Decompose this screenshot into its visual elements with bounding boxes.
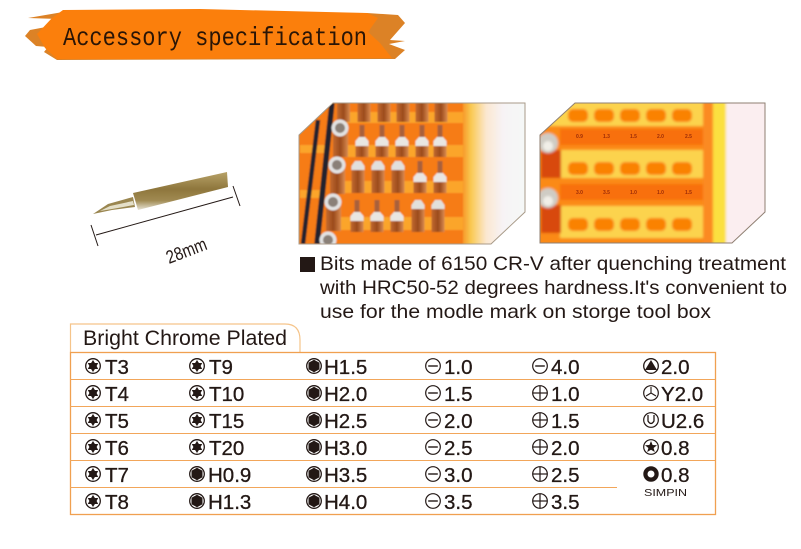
mold markings: 2.0 (657, 134, 664, 140)
paragraph line 3: use for the modle mark on storge tool box (320, 301, 711, 323)
T20 (190, 437, 244, 460)
star 0.8 (644, 437, 690, 460)
H2.0: H2.0 (324, 383, 367, 406)
column: torx T3-T8 (86, 356, 129, 514)
mold markings: 3.0 (576, 190, 583, 196)
T3 (86, 356, 129, 379)
H3.0: H3.0 (324, 437, 367, 460)
title banner (25, 9, 405, 60)
mold markings: 1.5 (630, 134, 637, 140)
star 0.8: 0.8 (661, 437, 690, 460)
phillips 1.5 (533, 410, 580, 433)
phillips 2.5: 2.5 (551, 464, 580, 487)
table frame and row lines (70, 352, 716, 514)
mold markings: 3.5 (603, 190, 610, 196)
triangle 2.0: 2.0 (661, 356, 690, 379)
dimension label: 28mm (163, 233, 210, 268)
T10 (190, 383, 244, 406)
tray ledges (300, 112, 473, 230)
right stripes (703, 100, 713, 248)
column: slotted 1.0-3.5 (426, 356, 472, 514)
slot 1.5: 1.5 (444, 383, 472, 406)
U2.6: U2.6 (661, 410, 704, 433)
mold markings: 1.0 (657, 190, 664, 196)
darker recess shading (560, 129, 703, 200)
photo frame (540, 103, 765, 243)
column: slot 4.0 and phillips (533, 356, 580, 514)
slot 3.5 (426, 491, 472, 514)
mold markings: 1.0 (630, 190, 637, 196)
sockets (538, 133, 561, 233)
slot 4.0 (533, 356, 580, 379)
title text: Accessory specification (63, 23, 367, 53)
T5 (86, 410, 129, 433)
T9: T9 (209, 356, 233, 379)
dimension line (91, 186, 240, 246)
white fade (462, 104, 524, 244)
slot 2.5: 2.5 (444, 437, 472, 460)
triangle 2.0 (644, 356, 690, 379)
mold markings: 0.9 (576, 134, 583, 140)
icon: screwdriver bit (93, 172, 228, 214)
phillips 1.0 (533, 383, 580, 406)
description text block (300, 253, 787, 323)
slot 3.5: 3.5 (444, 491, 472, 514)
phillips 3.5 (533, 491, 580, 514)
H1.3: H1.3 (208, 491, 251, 514)
simpin 0.8 (644, 464, 690, 499)
mold markings (576, 134, 692, 196)
slot 1.0: 1.0 (444, 356, 472, 379)
photo: bits in storage box (300, 104, 524, 244)
photo frame (299, 103, 525, 244)
phillips 1.0: 1.0 (551, 383, 580, 406)
specification table (70, 324, 716, 514)
column: special bits (644, 356, 704, 499)
slot 2.0: 2.0 (444, 410, 472, 433)
slot 2.5 (426, 437, 472, 460)
banner brush shape (25, 9, 405, 60)
phillips 2.5 (533, 464, 580, 487)
T4 (86, 383, 129, 406)
phillips 2.0 (533, 437, 580, 460)
T20: T20 (209, 437, 244, 460)
H4.0: H4.0 (324, 491, 367, 514)
bits (350, 90, 448, 232)
H3.5: H3.5 (324, 464, 367, 487)
H2.5: H2.5 (324, 410, 367, 433)
slot 1.0 (426, 356, 472, 379)
photo: storage box markings (540, 104, 764, 242)
phillips 1.5: 1.5 (551, 410, 580, 433)
slot 4.0: 4.0 (551, 356, 580, 379)
T4: T4 (105, 383, 129, 406)
bullet square (300, 257, 315, 272)
phillips 3.5: 3.5 (551, 491, 580, 514)
bit photo with dimension (91, 172, 240, 268)
sockets (318, 104, 351, 244)
H1.5: H1.5 (324, 356, 367, 379)
mold markings: 1.5 (685, 190, 692, 196)
Y2.0: Y2.0 (661, 383, 703, 406)
T15: T15 (209, 410, 244, 433)
slot 3.0: 3.0 (444, 464, 472, 487)
paragraph line 2: with HRC50-52 degrees hardness.It's convenient to (319, 277, 787, 299)
mold markings: 1.3 (603, 134, 610, 140)
T7: T7 (105, 464, 129, 487)
black rails (303, 103, 332, 244)
T8 (86, 491, 129, 514)
simpin 0.8: SIMPIN (644, 487, 687, 499)
column: T9-T20 and H0.9-H1.3 (190, 356, 251, 514)
phillips 2.0: 2.0 (551, 437, 580, 460)
H0.9: H0.9 (208, 464, 251, 487)
T7 (86, 464, 129, 487)
T15 (190, 410, 244, 433)
slot 1.5 (426, 383, 472, 406)
slot 3.0 (426, 464, 472, 487)
table tab: Bright Chrome Plated (83, 327, 287, 350)
slot 2.0 (426, 410, 472, 433)
yellow ledges (549, 104, 704, 240)
T6: T6 (105, 437, 129, 460)
T9 (190, 356, 233, 379)
T3: T3 (105, 356, 129, 379)
simpin 0.8: 0.8 (661, 464, 690, 487)
paragraph line 1: Bits made of 6150 CR-V after quenching treatment (320, 253, 787, 275)
mold markings: 2.5 (685, 134, 692, 140)
T5: T5 (105, 410, 129, 433)
orange recesses (568, 109, 692, 231)
T6 (86, 437, 129, 460)
T10: T10 (209, 383, 244, 406)
column: hex H1.5-H4.0 (307, 356, 367, 514)
T8: T8 (105, 491, 129, 514)
